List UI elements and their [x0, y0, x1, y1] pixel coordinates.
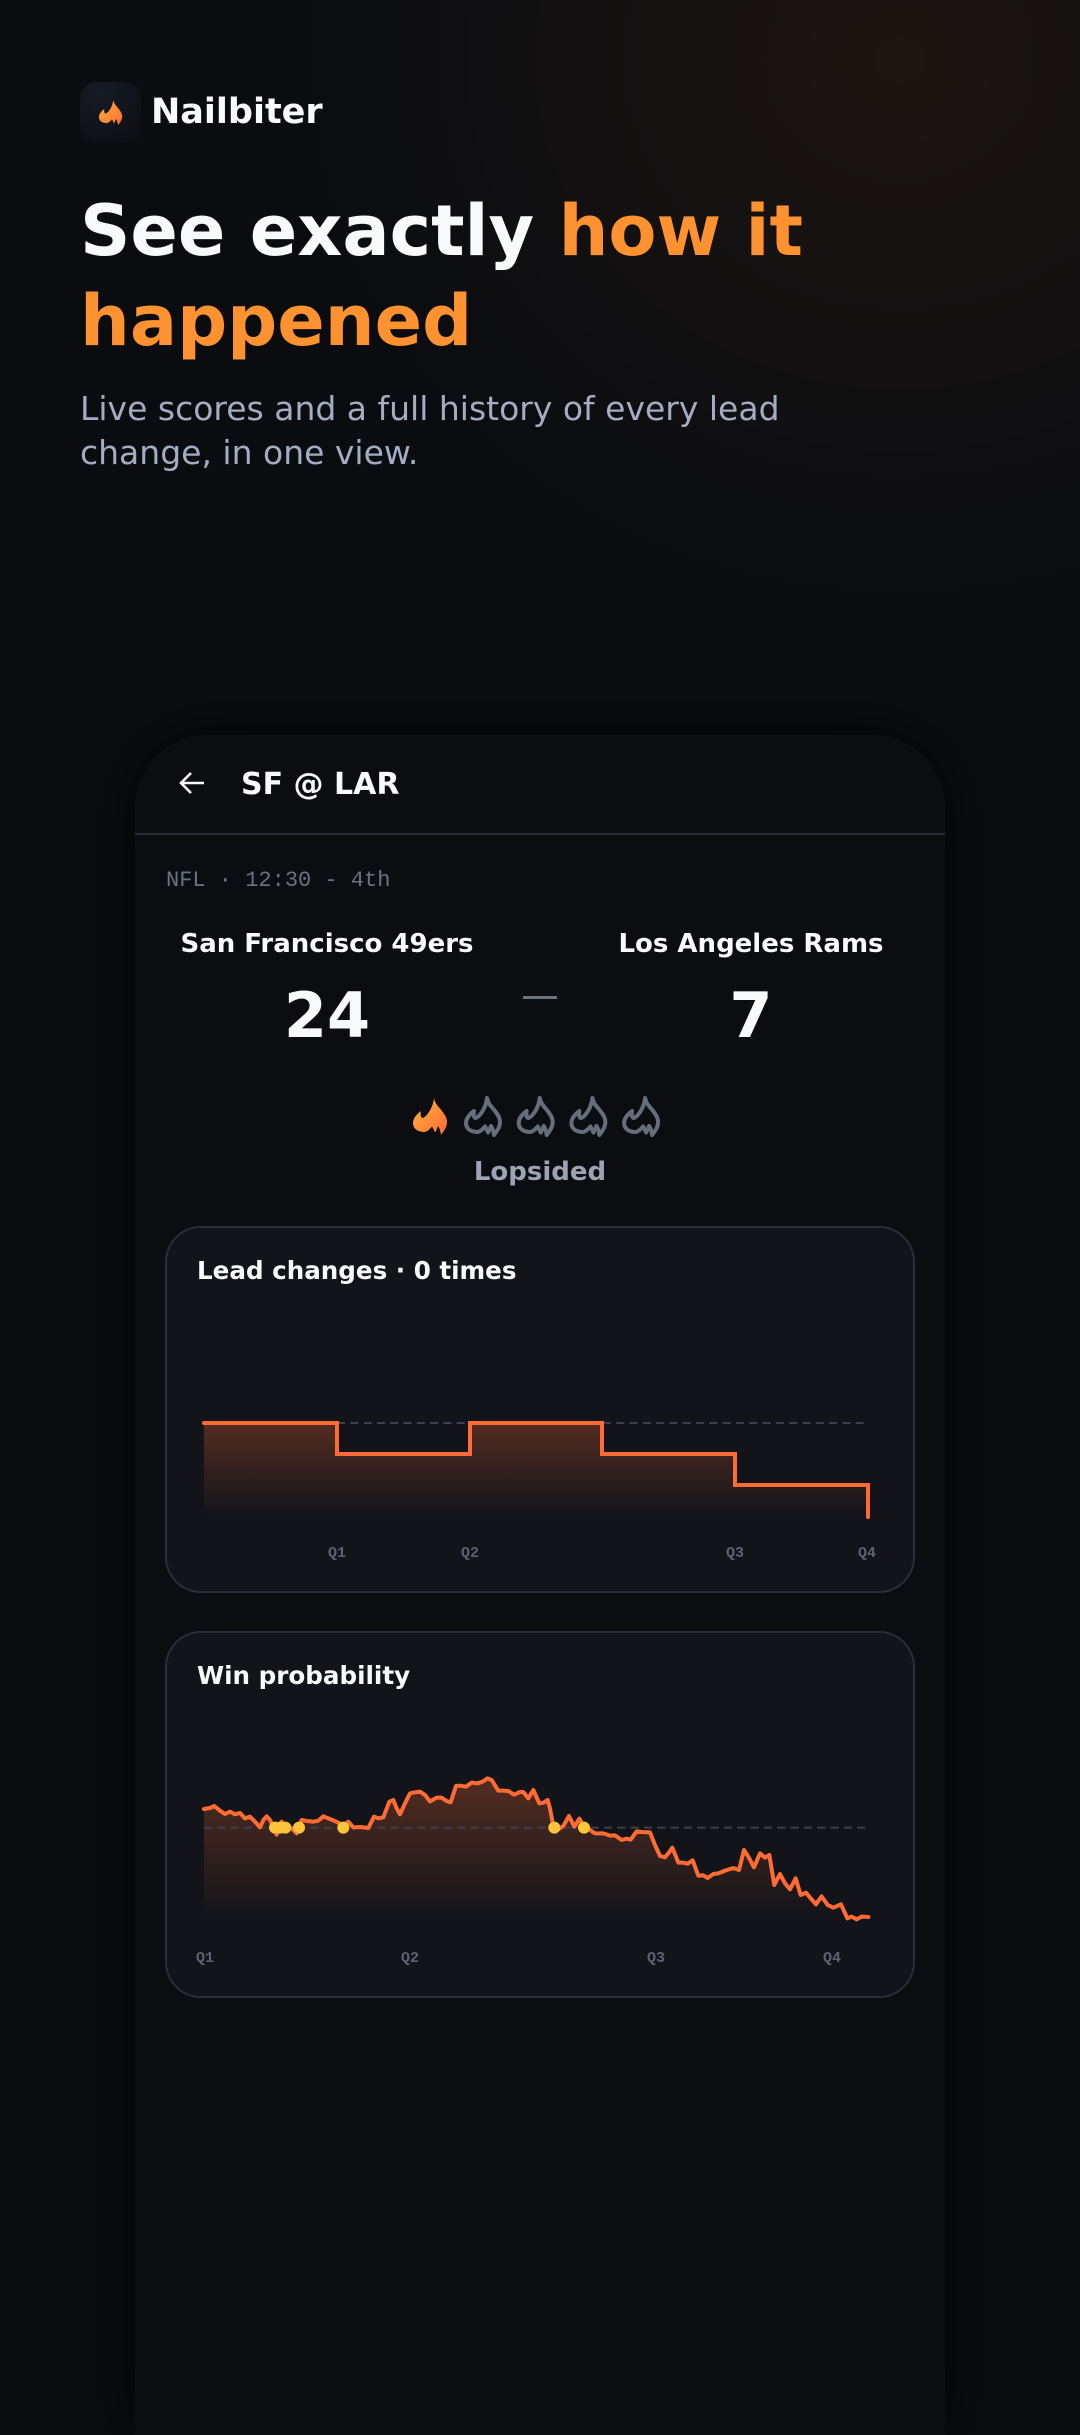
icon: back arrow	[179, 772, 204, 794]
subheading	[80, 389, 780, 472]
chart: win probability line: Q3	[647, 1950, 665, 1967]
flame rating icons	[413, 1096, 660, 1138]
chart: lead changes step line: Q1	[328, 1545, 346, 1562]
phone mockup	[135, 735, 945, 2435]
chart: win probability line: Q4	[823, 1950, 841, 1967]
home score: 7	[729, 979, 773, 1052]
brand name: Nailbiter	[151, 92, 323, 132]
subheading: change, in one view.	[80, 433, 418, 472]
chart: lead changes step line: Q4	[858, 1545, 876, 1562]
headline: happened	[80, 280, 472, 362]
chart: lead changes step line: Q2	[461, 1545, 479, 1562]
subheading: Live scores and a full history of every lead	[80, 389, 780, 428]
rating label: Lopsided	[474, 1157, 606, 1187]
headline: See exactly how it	[80, 190, 803, 272]
chart: win probability line	[196, 1778, 868, 1967]
chart: win probability line: Q1	[196, 1950, 214, 1967]
panel heading: Lead changes · 0 times	[197, 1256, 517, 1285]
logo icon: flame tile	[80, 82, 141, 143]
panel: lead changes	[165, 1226, 915, 1593]
chart: lead changes step line: Q3	[726, 1545, 744, 1562]
away score: 24	[284, 979, 370, 1052]
chart: win probability line: Q2	[401, 1950, 419, 1967]
home team name: Los Angeles Rams	[618, 929, 884, 959]
panel: win probability	[165, 1631, 915, 1998]
game meta: NFL · 12:30 - 4th	[166, 868, 390, 893]
screen title: SF @ LAR	[241, 767, 399, 802]
away team name: San Francisco 49ers	[180, 929, 474, 959]
chart: lead changes step line	[204, 1423, 876, 1562]
score dash	[523, 996, 557, 999]
panel heading: Win probability	[197, 1661, 410, 1690]
headline	[80, 190, 803, 362]
